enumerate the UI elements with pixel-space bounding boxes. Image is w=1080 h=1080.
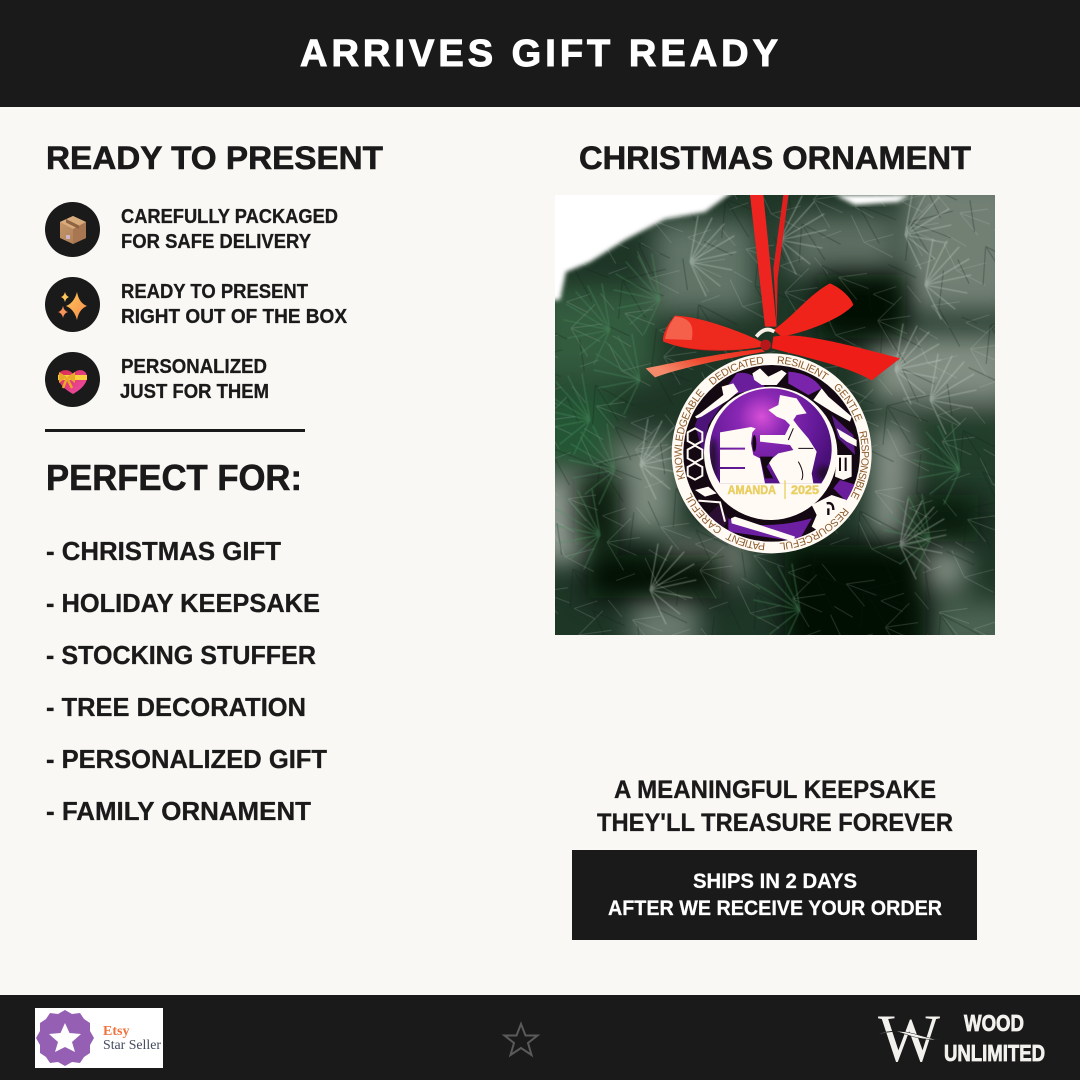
tagline: THEY'LL TREASURE FOREVER [597, 809, 953, 837]
tagline [597, 776, 953, 837]
engraved ring words: PATIENT [725, 534, 764, 550]
text: carefully packaged [121, 206, 338, 253]
list: occasions: - PERSONALIZED GIFT [46, 744, 327, 774]
foliage light and dark masses, traced in 3x crop coordinates [555, 195, 995, 635]
feature: carefully packaged [45, 202, 338, 257]
engraved ring words: CAREFUL [686, 492, 721, 534]
text: personalized: PERSONALIZED [121, 356, 267, 378]
feature: personalized [45, 352, 269, 407]
engraved ring words: RESOURCEFUL [780, 508, 849, 550]
heading: christmas ornament: CHRISTMAS ORNAMENT [579, 140, 971, 176]
engraved ring words: DEDICATED [708, 356, 764, 385]
icon: gift heart [45, 352, 100, 407]
list: occasions: - TREE DECORATION [46, 692, 306, 722]
badge: etsy star seller: Star Seller [103, 1038, 161, 1053]
logo: wood unlimited: UNLIMITED [944, 1040, 1045, 1066]
hive [720, 427, 765, 483]
beekeeper [760, 395, 817, 483]
text: ready to present: READY TO PRESENT [121, 281, 308, 303]
sky [835, 195, 910, 205]
red ribbon and bow [646, 195, 900, 380]
header band [0, 0, 1080, 107]
heading: ready to present: READY TO PRESENT [46, 140, 383, 176]
inner disc [704, 387, 837, 520]
text: ready to present: RIGHT OUT OF THE BOX [121, 306, 348, 328]
icon: package [45, 202, 100, 257]
icon: sparkles [45, 277, 100, 332]
engraved ring words: KNOWLEDGEABLE [674, 388, 704, 480]
text: personalized [120, 356, 269, 403]
logo: wood unlimited [878, 1000, 1045, 1076]
engraved ring words: GENTLE [834, 384, 863, 422]
shipping callout: SHIPS IN 2 DAYS [693, 870, 857, 893]
engraved ring words: RESILIENT [778, 356, 829, 380]
ornament [672, 353, 872, 553]
list: occasions: - FAMILY ORNAMENT [46, 796, 311, 826]
tool window [683, 365, 860, 542]
list: occasions: - STOCKING STUFFER [46, 640, 316, 670]
heading: perfect for: PERFECT FOR: [46, 457, 302, 498]
tagline: A MEANINGFUL KEEPSAKE [614, 776, 936, 804]
list: occasions [46, 536, 327, 826]
pine needle tufts [544, 189, 976, 644]
panel: perfect for [46, 457, 327, 826]
logo: wood unlimited: WOOD [964, 1010, 1024, 1036]
engraved ring words: RESPONSIBLE [850, 431, 869, 500]
footer band [0, 995, 1080, 1080]
shipping callout [572, 850, 977, 940]
wood disc [672, 353, 872, 553]
logo: wood unlimited: W [878, 1000, 941, 1076]
title: ARRIVES GIFT READY [300, 33, 778, 75]
badge: etsy star seller [35, 1008, 163, 1068]
ornament: 2025 [791, 483, 819, 497]
personalized name: AMANDA [728, 483, 776, 497]
photo: ornament on pine branches [555, 195, 995, 635]
text: carefully packaged: FOR SAFE DELIVERY [121, 231, 312, 253]
text: personalized: JUST FOR THEM [120, 381, 269, 403]
engraved ring words [674, 356, 869, 550]
text: carefully packaged: CAREFULLY PACKAGED [121, 206, 338, 228]
tool silhouettes [695, 368, 857, 542]
feature: ready to present [45, 277, 348, 332]
list: occasions: - CHRISTMAS GIFT [46, 536, 281, 566]
icon: star outline [504, 1024, 538, 1055]
list: occasions: - HOLIDAY KEEPSAKE [46, 588, 320, 618]
panel: ready to present [45, 140, 383, 407]
badge: etsy star seller: Etsy [103, 1024, 129, 1039]
text: ready to present [121, 281, 348, 328]
shipping callout: AFTER WE RECEIVE YOUR ORDER [608, 897, 942, 920]
